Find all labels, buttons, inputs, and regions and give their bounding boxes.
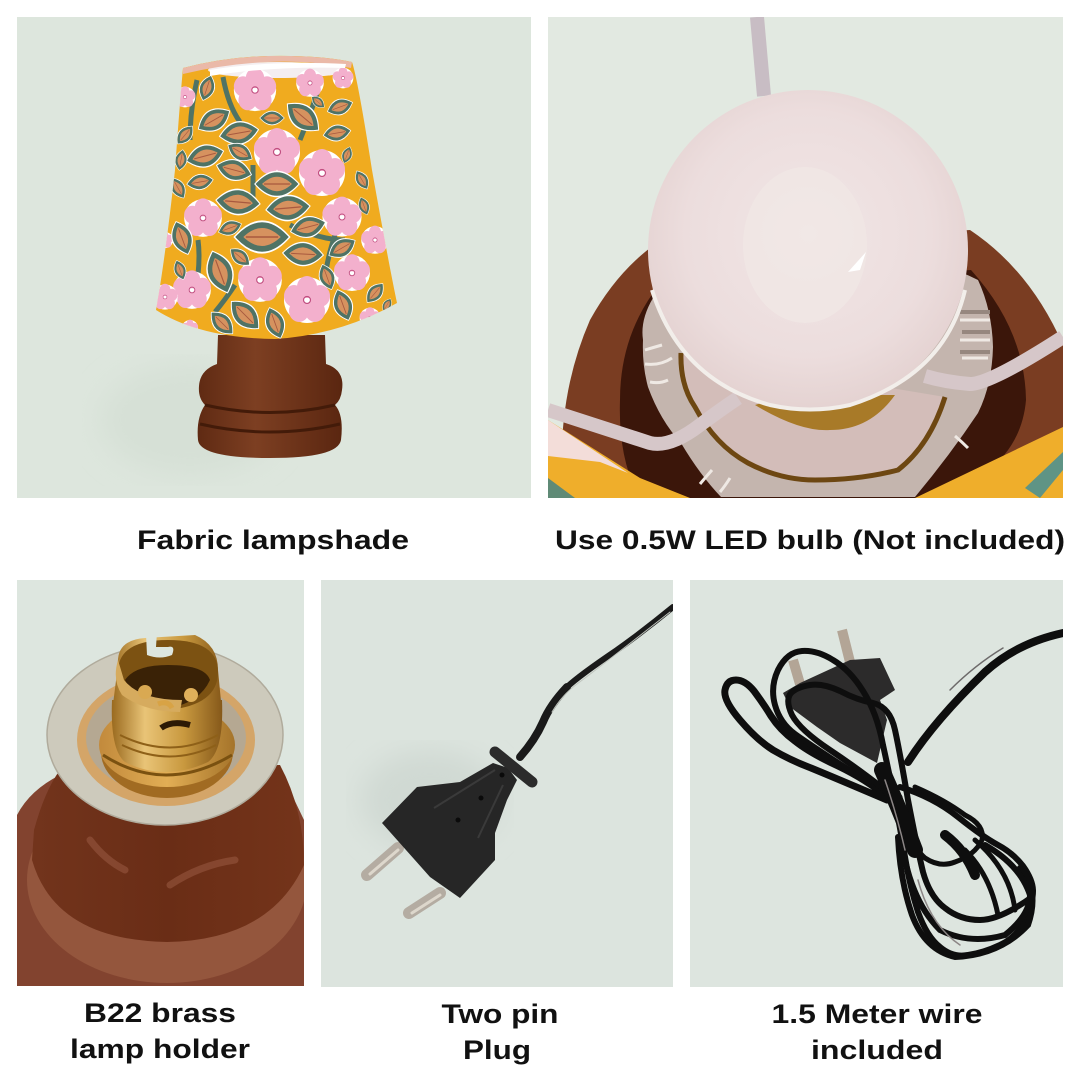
cord above bulb	[757, 17, 764, 96]
label: brass lamp holder	[70, 998, 251, 1064]
metal washer	[47, 645, 283, 825]
pins	[367, 848, 440, 913]
brass holder	[99, 632, 235, 798]
frosted bulb	[648, 90, 968, 410]
fabric lampshade	[156, 56, 397, 339]
label: brass lamp holder: lamp holder	[70, 1034, 251, 1064]
label: two pin plug: Plug	[463, 1035, 531, 1065]
coiled wire	[725, 633, 1063, 957]
plug body	[382, 752, 532, 898]
dark interior	[620, 270, 1026, 498]
wooden lamp base	[198, 335, 342, 458]
label: wire length: 1.5 Meter wire	[772, 999, 982, 1029]
panel: LED bulb photo	[548, 17, 1063, 498]
panel: coiled wire photo	[690, 580, 1063, 987]
label: brass lamp holder: B22 brass	[84, 998, 236, 1028]
brass holder	[755, 395, 895, 430]
translucent wires	[548, 337, 1063, 444]
wooden body	[562, 230, 1063, 471]
pins	[793, 630, 850, 684]
brass ring outline	[681, 353, 945, 480]
wire	[520, 607, 673, 757]
panel: fabric lampshade photo	[17, 17, 531, 498]
metal washer	[642, 253, 993, 497]
panel: two pin plug photo	[321, 580, 673, 987]
panel: brass lamp holder photo	[17, 580, 307, 986]
label: two pin plug: Two pin	[442, 999, 558, 1029]
label: wire length: included	[811, 1035, 943, 1065]
lampshade edges	[548, 420, 690, 498]
label: wire length	[772, 999, 982, 1065]
label: LED bulb: Use 0.5W LED bulb (Not included)	[555, 525, 1065, 555]
wooden body	[17, 765, 307, 986]
plug	[783, 658, 895, 763]
label: two pin plug	[442, 999, 558, 1065]
label: fabric lampshade: Fabric lampshade	[137, 525, 409, 555]
